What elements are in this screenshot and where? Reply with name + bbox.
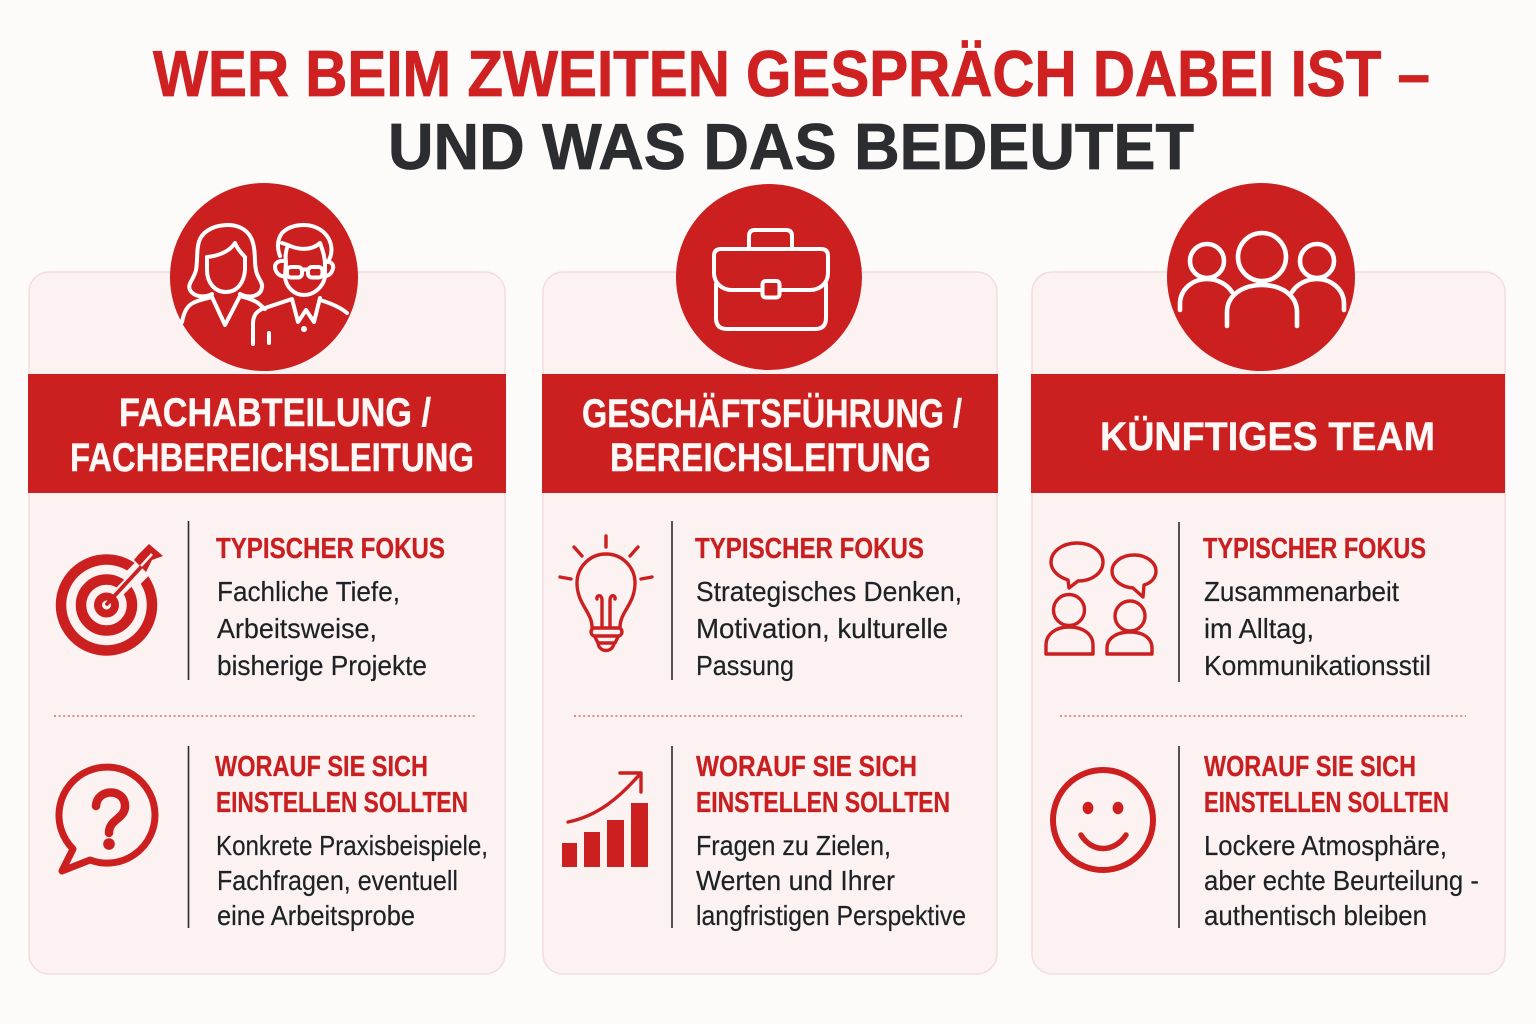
section: typischer Fokus: [1046, 522, 1431, 682]
focus text: Kommunikationsstil: [1204, 650, 1431, 681]
section: typischer Fokus: [560, 521, 962, 681]
focus text: Passung: [696, 650, 794, 681]
section: worauf einstellen: EINSTELLEN SOLLTEN: [216, 787, 468, 819]
icon: target with arrow: [61, 544, 163, 650]
header band: [1031, 374, 1505, 493]
focus text: [696, 576, 962, 681]
section: worauf einstellen: WORAUF SIE SICH: [215, 751, 428, 783]
focus text: Motivation, kulturelle: [696, 613, 948, 644]
icon: question bubble: [59, 767, 155, 871]
expectation text: Fachfragen, eventuell: [217, 865, 458, 896]
title: WER BEIM ZWEITEN GESPRÄCH DABEI IST –: [153, 37, 1430, 110]
expectation text: langfristigen Perspektive: [696, 900, 966, 931]
header band: [542, 374, 998, 493]
title: [153, 37, 1430, 183]
section: typischer Fokus: TYPISCHER FOKUS: [695, 533, 924, 565]
section: typischer Fokus: TYPISCHER FOKUS: [216, 533, 445, 565]
focus text: im Alltag,: [1204, 613, 1314, 644]
section: worauf einstellen: EINSTELLEN SOLLTEN: [1204, 787, 1449, 819]
header band: [28, 374, 506, 493]
header band: FACHBEREICHSLEITUNG: [70, 436, 474, 480]
expectation text: eine Arbeitsprobe: [217, 900, 415, 931]
header band: FACHABTEILUNG /: [119, 391, 431, 435]
title: UND WAS DAS BEDEUTET: [388, 110, 1194, 183]
section: worauf einstellen: WORAUF SIE SICH: [1204, 751, 1416, 783]
focus text: [1204, 576, 1431, 681]
expectation text: Lockere Atmosphäre,: [1204, 830, 1447, 861]
section: worauf einstellen: [1053, 746, 1479, 931]
header band: KÜNFTIGES TEAM: [1100, 414, 1435, 459]
card background: [29, 272, 505, 974]
icon: light bulb: [560, 536, 652, 650]
section: worauf einstellen: [59, 746, 488, 931]
expectation text: aber echte Beurteilung -: [1204, 865, 1479, 896]
icon: smiley: [1053, 770, 1153, 870]
header band: GESCHÄFTSFÜHRUNG /: [582, 391, 962, 436]
expectation text: Fragen zu Zielen,: [696, 830, 891, 861]
focus text: bisherige Projekte: [217, 650, 427, 681]
expectation text: [216, 830, 488, 931]
focus text: [217, 576, 427, 681]
section: worauf einstellen: EINSTELLEN SOLLTEN: [696, 787, 950, 819]
icon: team of three: [1167, 183, 1355, 371]
section: worauf einstellen: [562, 746, 966, 931]
expectation text: Werten und Ihrer: [696, 865, 895, 896]
expectation text: Konkrete Praxisbeispiele,: [216, 830, 488, 861]
expectation text: authentisch bleiben: [1204, 900, 1427, 931]
focus text: Fachliche Tiefe,: [217, 576, 400, 607]
panel: Geschäftsführung: [542, 184, 998, 974]
section: typischer Fokus: [61, 521, 445, 681]
icon: two people: [170, 183, 358, 371]
icon: briefcase: [676, 184, 862, 370]
expectation text: [1204, 830, 1479, 931]
section: typischer Fokus: TYPISCHER FOKUS: [1203, 533, 1426, 565]
card background: [543, 272, 997, 974]
focus text: Arbeitsweise,: [217, 613, 377, 644]
panel: Fachabteilung: [28, 183, 506, 974]
panel: Künftiges Team: [1031, 183, 1505, 974]
header band: BEREICHSLEITUNG: [610, 436, 931, 480]
icon: growth bar chart: [562, 773, 648, 867]
icon: two people talking: [1046, 543, 1156, 654]
card background: [1032, 272, 1505, 974]
focus text: Strategisches Denken,: [696, 576, 962, 607]
expectation text: [696, 830, 966, 931]
focus text: Zusammenarbeit: [1204, 576, 1399, 607]
section: worauf einstellen: WORAUF SIE SICH: [696, 751, 917, 783]
